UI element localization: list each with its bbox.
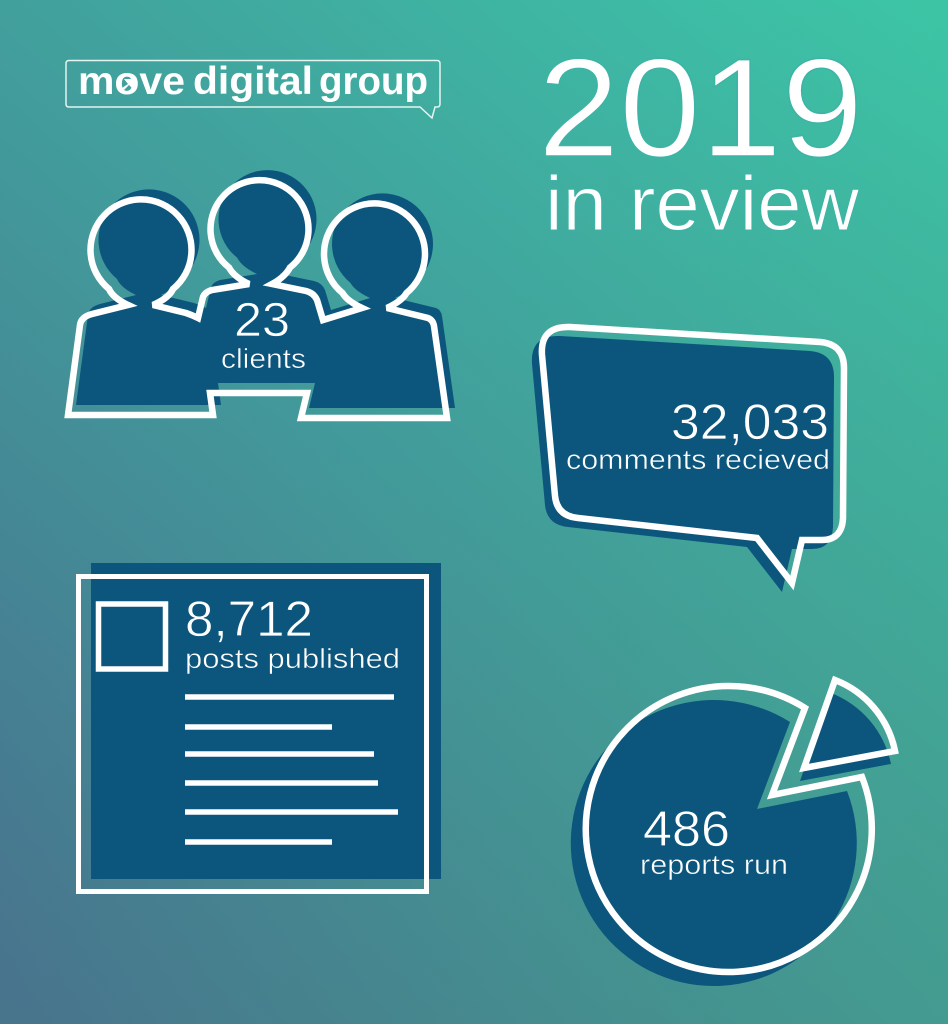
logo: move digital group — [66, 60, 440, 118]
panel: reports — [571, 680, 895, 986]
title subtitle: in review — [545, 161, 859, 247]
panel: clients — [68, 170, 455, 418]
speech bubble shadow — [532, 336, 834, 592]
logo wordmark — [78, 60, 428, 103]
logo speech-bubble frame — [66, 60, 440, 118]
logo arrow in the letter o — [122, 79, 134, 90]
panel: comments — [532, 327, 844, 592]
document outline — [78, 576, 426, 892]
panel: posts — [78, 563, 441, 892]
people icon shadow — [76, 170, 455, 408]
people icon outline — [68, 180, 447, 418]
pie body outline — [586, 686, 872, 972]
logo wordmark: move — [78, 60, 185, 103]
pie slice outline — [804, 680, 895, 768]
logo wordmark: group — [319, 60, 428, 103]
document shadow — [91, 563, 441, 879]
title year: 2019 — [538, 29, 863, 186]
clients number: 23 — [234, 294, 290, 347]
image placeholder square — [98, 604, 166, 669]
comments label: comments recieved — [566, 444, 830, 475]
document text lines — [185, 697, 398, 842]
posts label: posts published — [185, 643, 400, 674]
comments number: 32,033 — [671, 394, 829, 450]
title: 2019 in review — [538, 29, 863, 247]
pie body shadow — [571, 700, 857, 986]
speech bubble outline — [542, 327, 844, 583]
reports number: 486 — [643, 801, 730, 857]
reports label: reports run — [640, 849, 788, 880]
pie slice shadow — [800, 693, 891, 781]
clients label: clients — [221, 343, 306, 374]
posts number: 8,712 — [185, 591, 313, 647]
logo wordmark: digital — [193, 60, 313, 103]
